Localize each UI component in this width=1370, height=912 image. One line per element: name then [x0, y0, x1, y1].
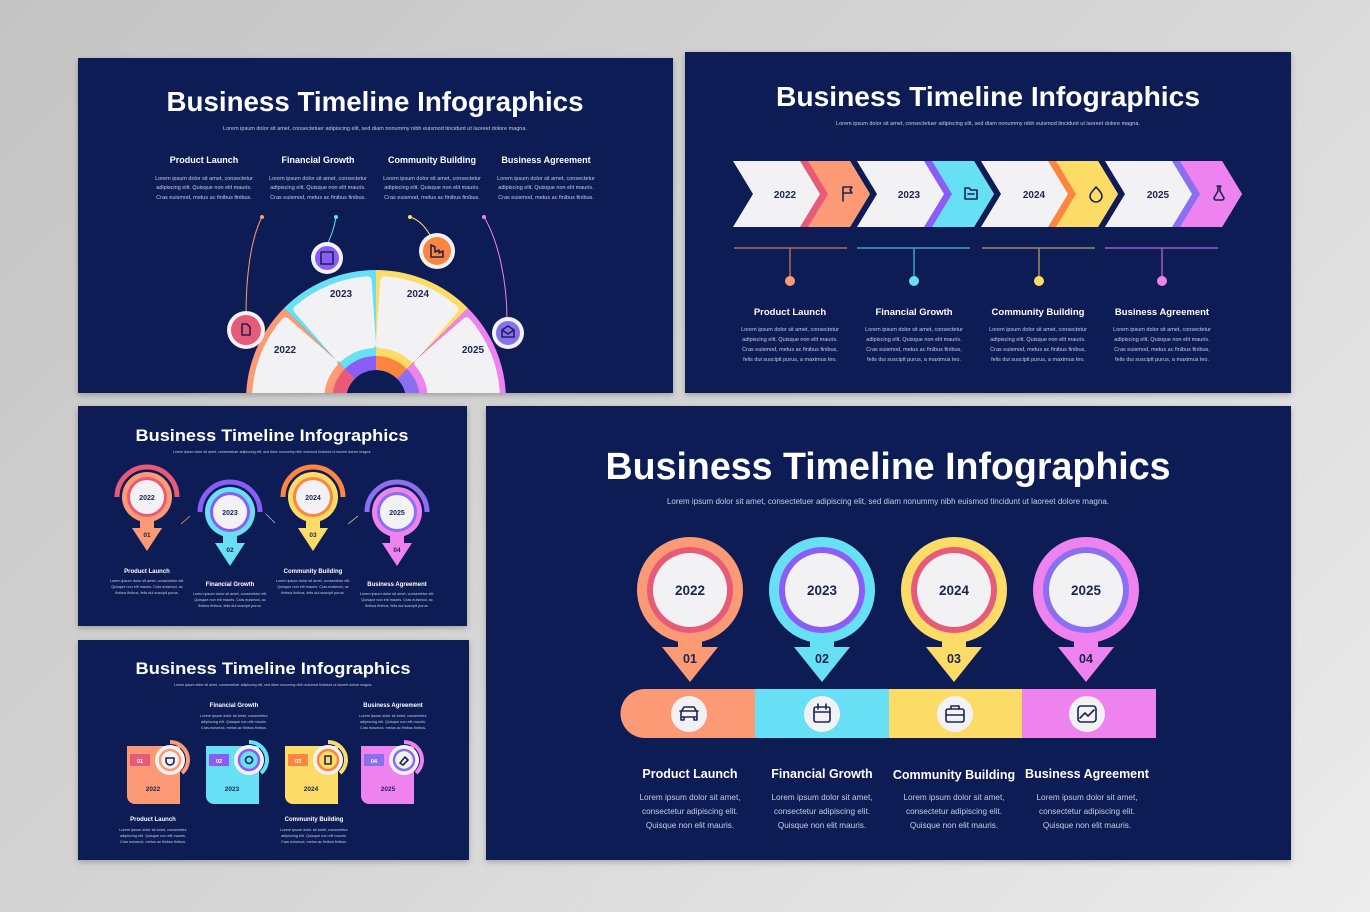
- chevrons: 2024: [1023, 190, 1046, 201]
- text block: pin descriptions: [110, 569, 434, 608]
- title: Business Timeline Infographics: [776, 81, 1200, 112]
- subtitle: Lorem ipsum dolor sit amet, consectetuer adipiscing elit, sed diam nonummy nibh euismod tincidunt ut laoreet dolore magna.: [836, 121, 1140, 127]
- text block: large descriptions: [639, 767, 1150, 830]
- chart: semicircle arch: [246, 270, 506, 393]
- text block: large descriptions: Community Building: [893, 768, 1015, 782]
- text block: headings and descriptions: Cras euismod, metus ac finibus finibus.: [270, 195, 366, 201]
- cards: 2025: [381, 786, 396, 793]
- text block: card descriptions: Lorem ipsum dolor sit amet, consectetur: [200, 714, 268, 718]
- text block: card descriptions: Lorem ipsum dolor sit amet, consectetur: [280, 828, 348, 832]
- text block: large descriptions: Quisque non elit mauris.: [646, 821, 734, 830]
- pins: 03: [309, 532, 317, 539]
- panel: semicircle timeline: [75, 57, 676, 398]
- text block: headings and descriptions: adipiscing elit. Quisque non elit mauris.: [384, 185, 480, 191]
- text block: chevron descriptions: Business Agreement: [1115, 307, 1210, 318]
- text block: card descriptions: Cras euismod, metus ac finibus finibus.: [201, 726, 267, 730]
- text block: chevron descriptions: Financial Growth: [875, 307, 953, 318]
- pins: 02: [226, 547, 234, 554]
- chevrons: [733, 161, 1242, 227]
- text block: chevron descriptions: Lorem ipsum dolor sit amet, consectetur: [865, 327, 963, 333]
- large pins: 2025: [1071, 583, 1102, 598]
- text block: chevron descriptions: Lorem ipsum dolor sit amet, consectetur: [1113, 327, 1211, 333]
- text block: chevron descriptions: felis dui suscipit purus, a maximus leo.: [991, 357, 1085, 363]
- text block: chevron descriptions: Cras euismod, metus ac finibus finibus,: [990, 347, 1086, 353]
- text block: headings and descriptions: Cras euismod, metus ac finibus finibus.: [498, 195, 594, 201]
- bar with icons: [620, 689, 1156, 738]
- text block: pin descriptions: Lorem ipsum dolor sit amet, consectetur elit.: [193, 592, 267, 596]
- panel: chevron timeline: [685, 52, 1291, 393]
- cards: 2022: [146, 786, 161, 793]
- large pins: 01: [683, 652, 697, 666]
- text block: chevron descriptions: adipiscing elit. Quisque non elit mauris.: [742, 337, 838, 343]
- text block: pin descriptions: Lorem ipsum dolor sit amet, consectetur elit.: [276, 579, 350, 583]
- text block: chevron descriptions: felis dui suscipit purus, a maximus leo.: [743, 357, 837, 363]
- arrows between pins: [181, 514, 358, 524]
- text block: card descriptions: Cras euismod, metus ac finibus finibus.: [360, 726, 426, 730]
- pins: 2024: [305, 495, 321, 502]
- text block: headings and descriptions: Product Launch: [170, 155, 238, 165]
- title: Business Timeline Infographics: [136, 659, 410, 678]
- text block: card descriptions: Cras euismod, metus ac finibus finibus.: [281, 840, 347, 844]
- text block: large descriptions: Lorem ipsum dolor sit amet,: [1036, 793, 1138, 802]
- text block: card descriptions: Business Agreement: [363, 703, 423, 709]
- text block: pin descriptions: Quisque non elit mauris. Cras euismod, ac: [111, 585, 183, 589]
- text block: headings and descriptions: Cras euismod, metus ac finibus finibus.: [156, 195, 252, 201]
- large pins: 02: [815, 652, 829, 666]
- text block: large descriptions: Lorem ipsum dolor sit amet,: [903, 793, 1005, 802]
- text block: chevron descriptions: Lorem ipsum dolor sit amet, consectetur: [741, 327, 839, 333]
- chart: semicircle arch: 2024: [407, 289, 430, 300]
- text block: pin descriptions: Business Agreement: [367, 582, 427, 588]
- text block: headings and descriptions: [155, 155, 595, 201]
- chart: semicircle arch: 2023: [330, 289, 353, 300]
- text block: card descriptions: Lorem ipsum dolor sit amet, consectetur: [359, 714, 427, 718]
- text block: large descriptions: consectetur adipiscing elit.: [906, 807, 1002, 816]
- text block: pin descriptions: Quisque non elit mauris. Cras euismod, ac: [194, 598, 266, 602]
- text block: headings and descriptions: adipiscing elit. Quisque non elit mauris.: [156, 185, 252, 191]
- cards: 02: [216, 759, 222, 765]
- large pins: 2022: [675, 583, 705, 598]
- text block: card descriptions: Product Launch: [130, 817, 176, 823]
- text block: chevron descriptions: Community Building: [992, 307, 1085, 318]
- text block: card descriptions: adipiscing elit. Quisque non elit mauris.: [201, 720, 267, 724]
- text block: headings and descriptions: Financial Growth: [281, 155, 355, 165]
- text block: headings and descriptions: Lorem ipsum dolor sit amet, consectetur: [497, 176, 595, 182]
- subtitle: Lorem ipsum dolor sit amet, consectetuer adipiscing elit, sed diam nonummy nibh euismod tincidunt ut laoreet dolore magna.: [174, 683, 372, 687]
- text block: headings and descriptions: Lorem ipsum dolor sit amet, consectetur: [269, 176, 367, 182]
- text block: chevron descriptions: Cras euismod, metus ac finibus finibus,: [742, 347, 838, 353]
- panel: card timeline: [78, 640, 469, 860]
- pins: [117, 467, 427, 566]
- pins: 2023: [222, 510, 238, 517]
- pins: 2025: [389, 510, 405, 517]
- connector lines: [246, 215, 507, 320]
- text block: pin descriptions: Financial Growth: [206, 582, 255, 588]
- text block: card descriptions: Cras euismod, metus ac finibus finibus.: [120, 840, 186, 844]
- text block: chevron descriptions: adipiscing elit. Quisque non elit mauris.: [866, 337, 962, 343]
- text block: large descriptions: consectetur adipiscing elit.: [774, 807, 870, 816]
- text block: large descriptions: Lorem ipsum dolor sit amet,: [771, 793, 873, 802]
- text block: large descriptions: consectetur adipiscing elit.: [1039, 807, 1135, 816]
- text block: large descriptions: Financial Growth: [771, 767, 873, 781]
- subtitle: Lorem ipsum dolor sit amet, consectetuer adipiscing elit, sed diam nonummy nibh euismod tincidunt ut laoreet dolore magna.: [173, 450, 371, 454]
- text block: pin descriptions: Quisque non elit mauris. Cras euismod, ac: [361, 598, 433, 602]
- panel: large pin and bar timeline: [486, 406, 1291, 860]
- cards: 01: [137, 759, 143, 765]
- text block: large descriptions: Product Launch: [642, 767, 738, 781]
- text block: chevron descriptions: Cras euismod, metus ac finibus finibus,: [1114, 347, 1210, 353]
- large pins: 2024: [939, 583, 970, 598]
- text block: headings and descriptions: adipiscing elit. Quisque non elit mauris.: [498, 185, 594, 191]
- chevrons: 2023: [898, 190, 921, 201]
- chevrons: 2022: [774, 190, 797, 201]
- text block: pin descriptions: finibus finibus, felis dui suscipit purus.: [115, 591, 179, 595]
- text block: card descriptions: Lorem ipsum dolor sit amet, consectetur: [119, 828, 187, 832]
- chart: semicircle arch: 2022: [274, 345, 297, 356]
- pins: 2022: [139, 495, 155, 502]
- panel: small pin timeline: [78, 406, 467, 626]
- cards: [127, 742, 422, 804]
- text block: headings and descriptions: Cras euismod, metus ac finibus finibus.: [384, 195, 480, 201]
- text block: large descriptions: Quisque non elit mauris.: [1043, 821, 1131, 830]
- cards: 2023: [225, 786, 240, 793]
- text block: chevron descriptions: adipiscing elit. Quisque non elit mauris.: [990, 337, 1086, 343]
- text block: chevron descriptions: Product Launch: [754, 307, 826, 318]
- large pins: 03: [947, 652, 961, 666]
- chart: semicircle arch: 2025: [462, 345, 485, 356]
- title: Business Timeline Infographics: [606, 446, 1170, 488]
- icons: arch markers: [227, 233, 524, 349]
- text block: large descriptions: Quisque non elit mauris.: [778, 821, 866, 830]
- text block: card descriptions: adipiscing elit. Quisque non elit mauris.: [281, 834, 347, 838]
- subtitle: Lorem ipsum dolor sit amet, consectetuer adipiscing elit, sed diam nonummy nibh euismod tincidunt ut laoreet dolore magna.: [667, 497, 1109, 506]
- text block: headings and descriptions: Community Building: [388, 155, 476, 165]
- text block: pin descriptions: Quisque non elit mauris. Cras euismod, ac: [277, 585, 349, 589]
- large pins: 04: [1079, 652, 1093, 666]
- text block: card descriptions: adipiscing elit. Quisque non elit mauris.: [360, 720, 426, 724]
- pins: 04: [393, 547, 401, 554]
- cards: 03: [295, 759, 301, 765]
- text block: headings and descriptions: adipiscing elit. Quisque non elit mauris.: [270, 185, 366, 191]
- text block: card descriptions: adipiscing elit. Quisque non elit mauris.: [120, 834, 186, 838]
- text block: card descriptions: Financial Growth: [210, 703, 259, 709]
- text block: chevron descriptions: Cras euismod, metus ac finibus finibus,: [866, 347, 962, 353]
- text block: pin descriptions: finibus finibus, felis dui suscipit purus.: [365, 604, 429, 608]
- text block: chevron descriptions: felis dui suscipit purus, a maximus leo.: [1115, 357, 1209, 363]
- text block: large descriptions: Business Agreement: [1025, 767, 1150, 781]
- cards: 2024: [304, 786, 319, 793]
- text block: card descriptions: Community Building: [285, 817, 344, 823]
- title: Business Timeline Infographics: [136, 426, 408, 445]
- text block: pin descriptions: Lorem ipsum dolor sit amet, consectetur elit.: [360, 592, 434, 596]
- text block: large descriptions: Quisque non elit mauris.: [910, 821, 998, 830]
- text block: chevron descriptions: [741, 307, 1211, 363]
- text block: card descriptions: [119, 703, 427, 844]
- pins: 01: [143, 532, 151, 539]
- text block: chevron descriptions: adipiscing elit. Quisque non elit mauris.: [1114, 337, 1210, 343]
- large pins: [637, 537, 1139, 682]
- connectors with dots: [734, 248, 1218, 286]
- text block: chevron descriptions: felis dui suscipit purus, a maximus leo.: [867, 357, 961, 363]
- title: Business Timeline Infographics: [166, 86, 584, 117]
- large pins: 2023: [807, 583, 838, 598]
- text block: chevron descriptions: Lorem ipsum dolor sit amet, consectetur: [989, 327, 1087, 333]
- text block: pin descriptions: Community Building: [284, 569, 343, 575]
- text block: headings and descriptions: Business Agreement: [501, 155, 591, 165]
- cards: 04: [371, 759, 378, 765]
- text block: pin descriptions: finibus finibus, felis dui suscipit purus.: [198, 604, 262, 608]
- chevrons: 2025: [1147, 190, 1170, 201]
- text block: pin descriptions: Lorem ipsum dolor sit amet, consectetur elit.: [110, 579, 184, 583]
- text block: large descriptions: consectetur adipiscing elit.: [642, 807, 738, 816]
- subtitle: Lorem ipsum dolor sit amet, consectetuer adipiscing elit, sed diam nonummy nibh euismod tincidunt ut laoreet dolore magna.: [223, 126, 527, 132]
- text block: pin descriptions: Product Launch: [124, 569, 170, 575]
- text block: pin descriptions: finibus finibus, felis dui suscipit purus.: [281, 591, 345, 595]
- text block: large descriptions: Lorem ipsum dolor sit amet,: [639, 793, 741, 802]
- text block: headings and descriptions: Lorem ipsum dolor sit amet, consectetur: [155, 176, 253, 182]
- text block: headings and descriptions: Lorem ipsum dolor sit amet, consectetur: [383, 176, 481, 182]
